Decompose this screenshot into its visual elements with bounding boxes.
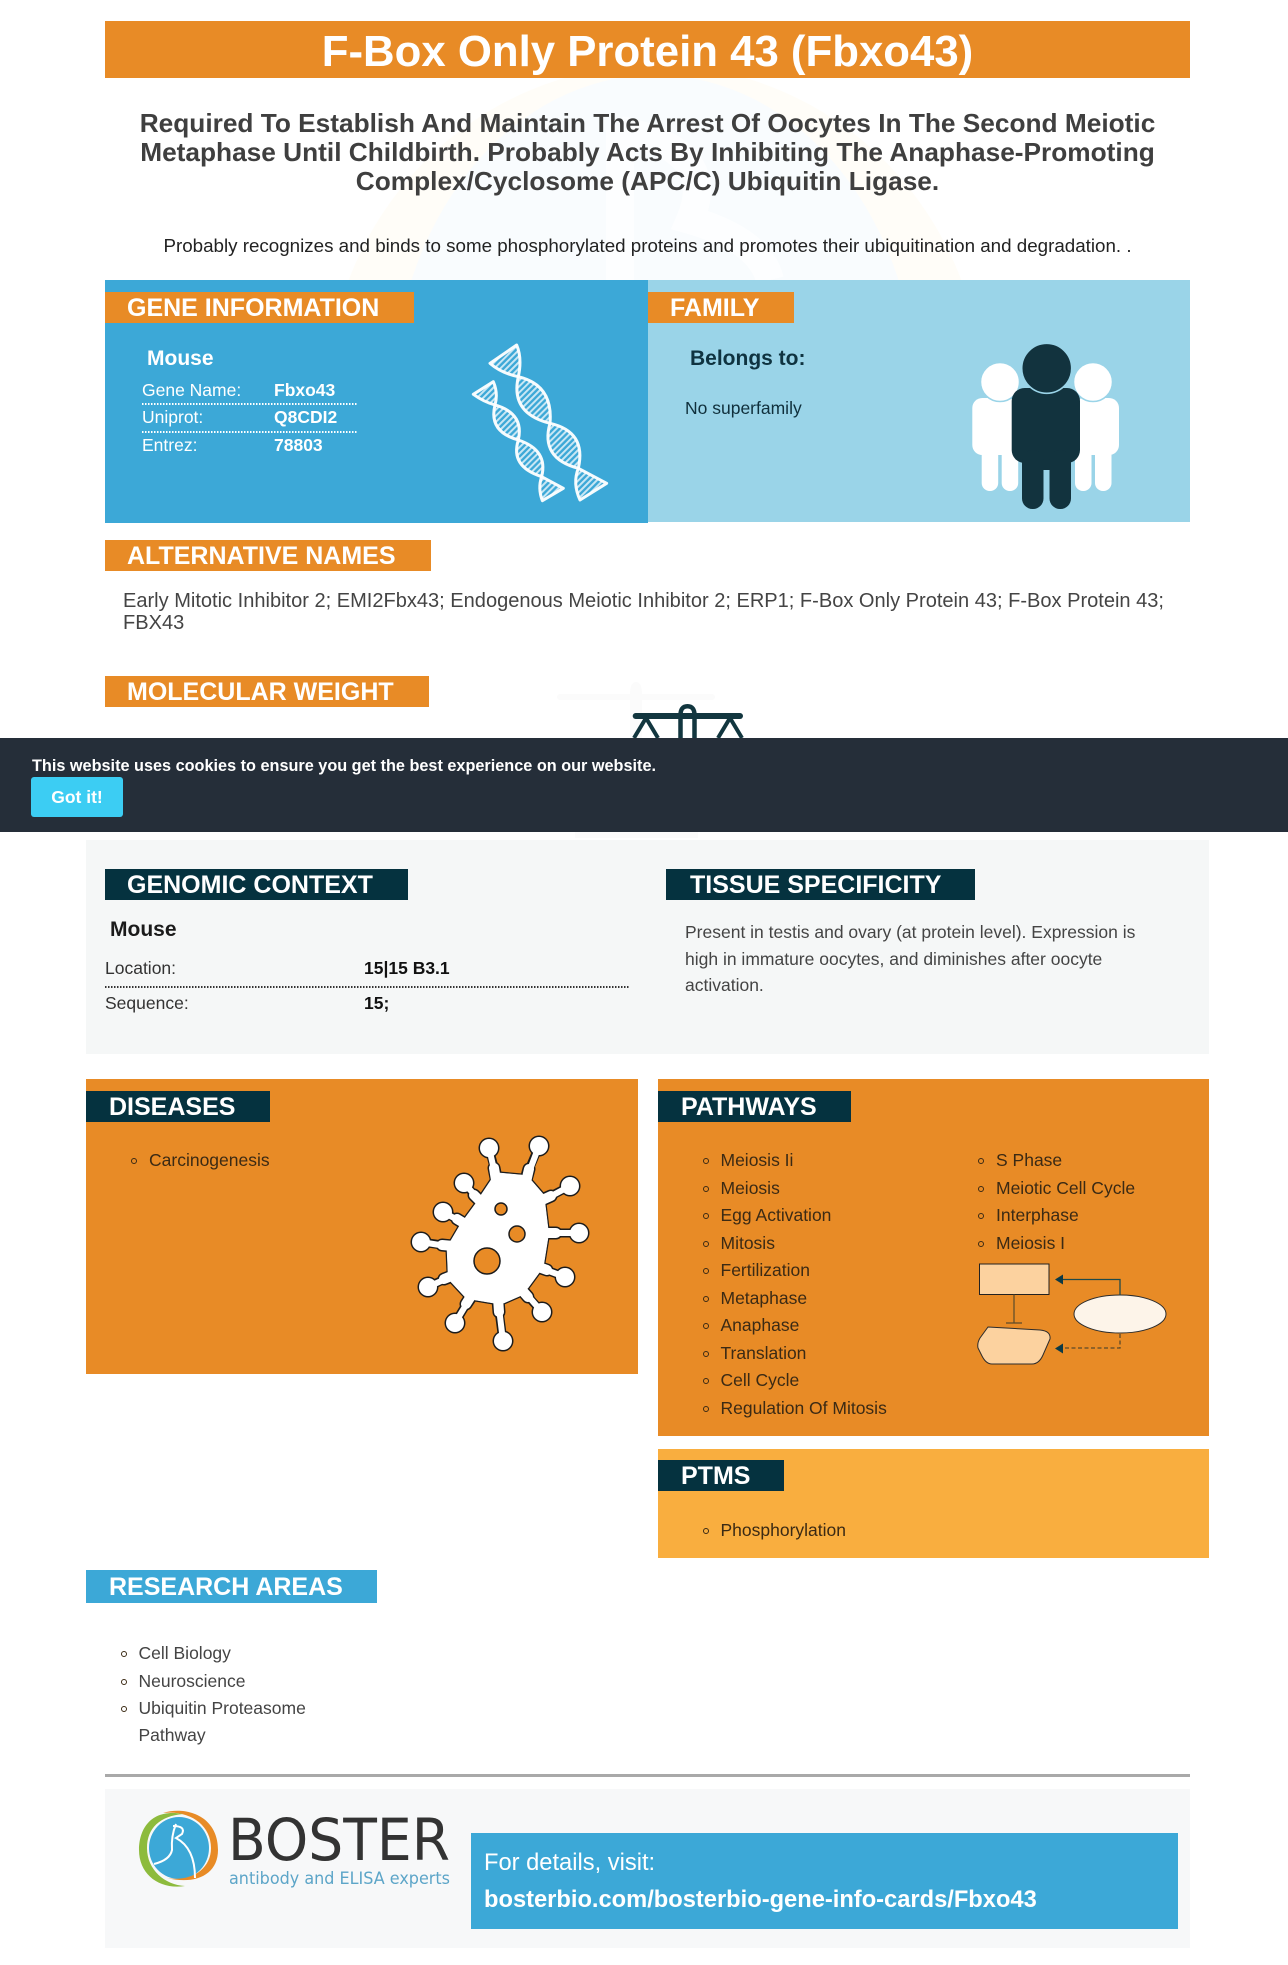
research areas list: Ubiquitin Proteasome bbox=[138, 1698, 306, 1718]
pathways list: second column: S Phase bbox=[996, 1150, 1062, 1170]
genomic context table bbox=[105, 958, 628, 1013]
alternative names text: Early Mitotic Inhibitor 2; EMI2Fbx43; Endogenous Meiotic Inhibitor 2; ERP1; F-Box Only Protein 43; F-Box Protein 43; bbox=[123, 590, 1164, 612]
tissue specificity text: high in immature oocytes, and diminishes after oocyte bbox=[685, 949, 1102, 969]
gene fields table: Entrez: bbox=[142, 435, 197, 455]
cookie accept button: Got it! bbox=[51, 787, 103, 807]
pathways list: second column: Interphase bbox=[996, 1205, 1079, 1225]
heading: genomic context: GENOMIC CONTEXT bbox=[127, 871, 373, 899]
panel: pathways bbox=[658, 1079, 1209, 1436]
alternative names text bbox=[123, 590, 1164, 634]
panel: PTMs bbox=[658, 1449, 1209, 1558]
genomic context table: 15|15 B3.1 bbox=[364, 958, 450, 978]
species name: Mouse bbox=[110, 918, 177, 941]
genomic context table: 15; bbox=[364, 993, 389, 1013]
pathways list: first column: Metaphase bbox=[720, 1288, 807, 1308]
PTMs list: Phosphorylation bbox=[720, 1520, 846, 1540]
call to action URL: bosterbio.com/bosterbio-gene-info-cards/Fbxo43 bbox=[484, 1887, 1037, 1913]
panel: genomic context and tissue specificity bbox=[86, 840, 1209, 1054]
gene fields table: 78803 bbox=[274, 435, 323, 455]
research areas list: Neuroscience bbox=[138, 1671, 246, 1691]
subtitle: protein function bbox=[140, 108, 1155, 196]
alternative names text: FBX43 bbox=[123, 612, 184, 634]
tissue specificity text bbox=[685, 922, 1135, 995]
pathways list: second column bbox=[978, 1150, 1135, 1253]
gene fields table: Uniprot: bbox=[142, 407, 203, 427]
divider rule bbox=[105, 1774, 1190, 1777]
heading: molecular weight: MOLECULAR WEIGHT bbox=[127, 678, 394, 706]
research areas list bbox=[121, 1643, 306, 1745]
research areas list: Cell Biology bbox=[138, 1643, 231, 1663]
panel: diseases bbox=[86, 1079, 638, 1374]
logo: Boster: BOSTER bbox=[228, 1806, 450, 1874]
title: F-Box Only Protein 43 (Fbxo43) bbox=[322, 27, 973, 76]
gene fields table bbox=[142, 380, 356, 455]
pathways list: first column: Regulation Of Mitosis bbox=[720, 1398, 887, 1418]
subtitle: protein function: Complex/Cyclosome (APC/C) Ubiquitin Ligase. bbox=[356, 166, 939, 196]
heading: PTMs: PTMS bbox=[681, 1462, 750, 1490]
cookie accept button bbox=[31, 777, 123, 817]
heading: research areas: RESEARCH AREAS bbox=[109, 1573, 343, 1601]
heading: research areas bbox=[86, 1570, 377, 1603]
panel: footer bbox=[105, 1789, 1190, 1948]
diseases list: Carcinogenesis bbox=[149, 1150, 270, 1170]
pathways list: first column: Meiosis Ii bbox=[720, 1150, 793, 1170]
pathways list: first column bbox=[703, 1150, 887, 1418]
superfamily text: No superfamily bbox=[685, 398, 802, 418]
belongs to heading: Belongs to: bbox=[690, 347, 806, 370]
pathways list: first column: Mitosis bbox=[720, 1233, 775, 1253]
subtitle: protein function: Metaphase Until Childbirth. Probably Acts By Inhibiting The Anaphase-Promoting bbox=[140, 137, 1155, 167]
cookie notice bar bbox=[0, 738, 1288, 832]
heading: pathways: PATHWAYS bbox=[681, 1093, 817, 1121]
gene fields table: Q8CDI2 bbox=[274, 407, 337, 427]
title bbox=[105, 21, 1190, 78]
panel: gene information bbox=[105, 280, 648, 523]
pathways list: first column: Egg Activation bbox=[720, 1205, 831, 1225]
heading: pathways bbox=[658, 1091, 851, 1122]
research areas list: Pathway bbox=[138, 1725, 206, 1745]
heading: alternative names: ALTERNATIVE NAMES bbox=[127, 542, 396, 570]
heading: family: FAMILY bbox=[670, 294, 759, 322]
panel: family bbox=[648, 280, 1190, 522]
gene fields table: Fbxo43 bbox=[274, 380, 335, 400]
pathways list: first column: Cell Cycle bbox=[720, 1370, 799, 1390]
tissue specificity text: activation. bbox=[685, 975, 764, 995]
heading: tissue specificity: TISSUE SPECIFICITY bbox=[690, 871, 941, 899]
heading: gene information: GENE INFORMATION bbox=[127, 294, 379, 322]
logo: Boster: antibody and ELISA experts bbox=[229, 1869, 450, 1889]
icon: DNA double helix bbox=[472, 344, 608, 502]
cookie notice text: This website uses cookies to ensure you get the best experience on our website. bbox=[32, 757, 656, 775]
subtitle: protein function: Required To Establish And Maintain The Arrest Of Oocytes In The Second Meiotic bbox=[140, 108, 1155, 138]
pathways list: first column: Meiosis bbox=[720, 1178, 780, 1198]
pathways list: first column: Fertilization bbox=[720, 1260, 810, 1280]
heading: PTMs bbox=[658, 1460, 784, 1491]
species name: Mouse bbox=[147, 347, 214, 370]
tissue specificity text: Present in testis and ovary (at protein level). Expression is bbox=[685, 922, 1135, 942]
pathways list: first column: Anaphase bbox=[720, 1315, 799, 1335]
call to action box bbox=[471, 1833, 1178, 1929]
icon: group of people bbox=[972, 344, 1119, 509]
heading: diseases: DISEASES bbox=[109, 1093, 235, 1121]
icon: virus bbox=[410, 1136, 590, 1352]
call to action label: For details, visit: bbox=[484, 1850, 655, 1876]
genomic context table: Location: bbox=[105, 958, 176, 978]
icon: balance scale bbox=[632, 704, 744, 738]
icon: pathway diagram bbox=[977, 1264, 1166, 1364]
heading: diseases bbox=[86, 1091, 270, 1122]
gene fields table: Gene Name: bbox=[142, 380, 241, 400]
description text: Probably recognizes and binds to some phosphorylated proteins and promotes their ubiquitination and degradation. . bbox=[163, 235, 1132, 256]
pathways list: second column: Meiotic Cell Cycle bbox=[996, 1178, 1135, 1198]
pathways list: first column: Translation bbox=[720, 1343, 806, 1363]
pathways list: second column: Meiosis I bbox=[996, 1233, 1065, 1253]
heading: family bbox=[648, 292, 794, 323]
logo: Boster bbox=[138, 1806, 450, 1889]
genomic context table: Sequence: bbox=[105, 993, 189, 1013]
